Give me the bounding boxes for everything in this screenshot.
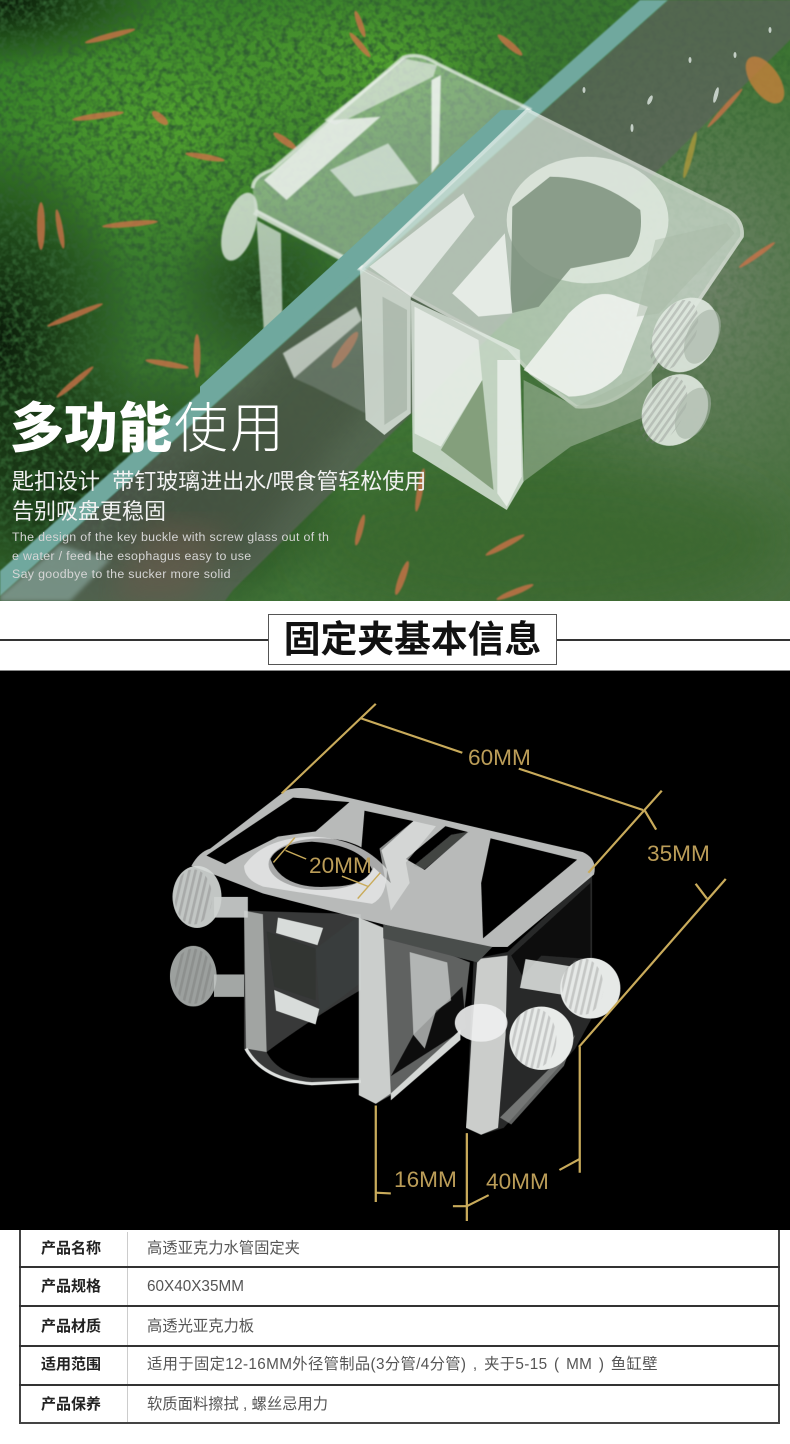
row: care [41, 1396, 328, 1413]
top plate [191, 788, 595, 947]
English description [12, 530, 329, 581]
front plate [362, 110, 742, 407]
dimension lines [273, 704, 726, 1221]
clamp legs [360, 268, 653, 510]
photo panel: acrylic clamp on aquarium glass [0, 0, 790, 601]
aquarium glass pane [0, 0, 790, 601]
ring around hole [244, 837, 387, 904]
right screw knobs [455, 958, 620, 1070]
Chinese description: 匙扣设计 带钉玻璃进出水/喂食管轻松使用 [12, 469, 426, 494]
row: scope of use: 适用范围 [41, 1356, 101, 1373]
dimension labels: 60MM [468, 745, 531, 770]
left screw knobs [170, 866, 248, 1007]
dimension labels: 16MM [394, 1167, 457, 1192]
water droplets on glass [582, 27, 772, 132]
dimension labels [309, 745, 710, 1194]
row: product material: 高透光亚克力板 [147, 1318, 254, 1335]
back plate [253, 55, 531, 413]
dimension labels: 40MM [486, 1169, 549, 1194]
row: product name [41, 1240, 300, 1257]
cylinder body [244, 911, 361, 1083]
English description: e water / feed the esophagus easy to use [12, 548, 251, 562]
row: product name: 高透亚克力水管固定夹 [147, 1240, 300, 1257]
acrylic clamp [200, 55, 742, 510]
clamp product photo [170, 788, 620, 1135]
product dimensions panel [0, 670, 790, 1230]
row: product name: 产品名称 [41, 1240, 101, 1257]
English description: Say goodbye to the sucker more solid [12, 567, 231, 581]
row: product size: 60X40X35MM [147, 1278, 244, 1295]
right screw knobs [631, 289, 730, 454]
left screw knob [214, 189, 265, 264]
glass edge crossing clamp [200, 110, 531, 413]
Chinese description: 告别吸盘更稳固 [12, 498, 166, 524]
row: product material [41, 1318, 254, 1335]
specification table [19, 1230, 780, 1424]
row: product material: 产品材质 [41, 1318, 101, 1335]
dimension labels: 20MM [309, 853, 372, 878]
centre leg [359, 918, 470, 1104]
top plate openings [206, 798, 577, 938]
right leg [466, 873, 592, 1135]
row: care: 软质面料擦拭 , 螺丝忌用力 [147, 1396, 328, 1413]
row: product size: 产品规格 [41, 1278, 101, 1295]
row: product size [41, 1278, 244, 1295]
row: care: 产品保养 [41, 1396, 101, 1413]
inner thread details [276, 918, 323, 945]
English description: The design of the key buckle with screw glass out of th [12, 530, 329, 544]
dimension labels: 35MM [647, 841, 710, 866]
row: scope of use: 适用于固定12-16MM外径管制品(3分管/4分管) , 夹于5-15 ( MM ) 鱼缸壁 [147, 1356, 658, 1373]
section title box: 固定夹基本信息 [284, 619, 541, 660]
Chinese description [12, 469, 426, 524]
moss background [0, 0, 790, 640]
heading: multifunction use: 多功能使用 [10, 399, 286, 459]
shrimp in the moss [37, 10, 790, 602]
